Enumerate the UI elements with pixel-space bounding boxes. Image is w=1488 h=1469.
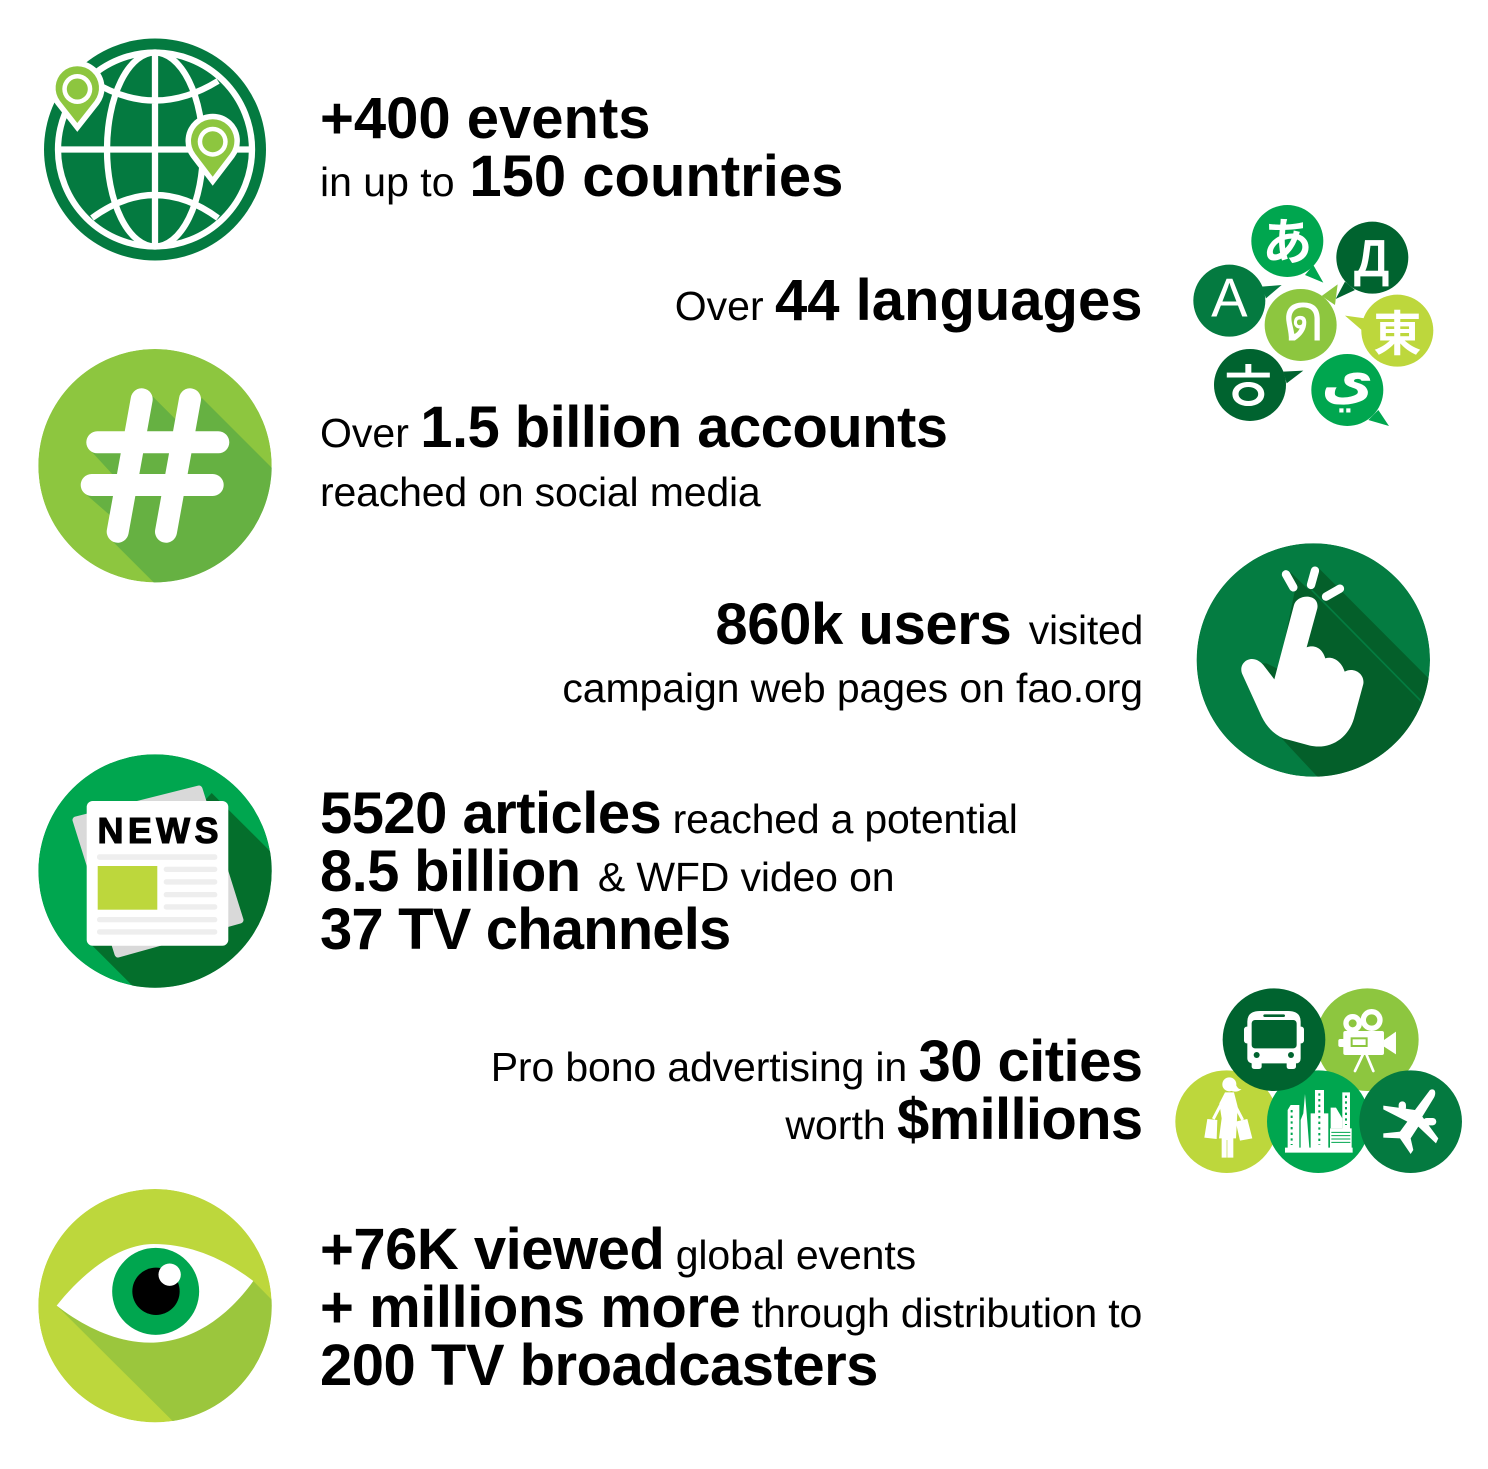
icon: bus	[1223, 988, 1325, 1091]
text: users visited: 860k users visited	[715, 592, 1143, 657]
text: accounts reached: Over 1.5 billion accounts	[320, 395, 947, 460]
icon: globe with map pins	[44, 38, 266, 260]
bubble: korean: ㅎ	[1215, 349, 1281, 429]
icon: pointing hand	[1196, 543, 1430, 777]
bubble: hiragana: あ	[1262, 214, 1312, 270]
bubble: hiragana	[1251, 205, 1323, 283]
icon: eye	[38, 1189, 287, 1422]
text: TV broadcasters: 200 TV broadcasters	[320, 1333, 878, 1398]
bubble: arabic	[1311, 346, 1389, 426]
text: TV channels: 37 TV channels	[320, 897, 730, 962]
text: worth millions: worth $millions	[784, 1087, 1142, 1152]
text: campaign web pages: campaign web pages on fao.org	[562, 665, 1143, 711]
text: millions more: + millions more through distribution to	[320, 1275, 1142, 1340]
icon: map pin right	[191, 119, 234, 177]
bubble: thai: ด	[1282, 281, 1325, 355]
text: viewed global events: +76K viewed global events	[320, 1217, 916, 1282]
icon: shopper	[1175, 1070, 1278, 1173]
bubble: arabic: ي	[1321, 346, 1373, 412]
icon: map pin left	[56, 66, 99, 123]
bubble: thai	[1263, 281, 1338, 362]
icon: newspaper: NEWS	[98, 810, 218, 851]
icon: city skyline	[1267, 1070, 1370, 1173]
text: articles: 5520 articles reached a potential	[320, 781, 1018, 846]
bubble: cyrillic	[1336, 222, 1408, 299]
bubble: cyrillic: Д	[1355, 230, 1389, 286]
bubble: latin: A	[1211, 268, 1248, 329]
icon: advertising circles	[1175, 988, 1462, 1173]
text: events and countries: +400 events	[320, 86, 651, 151]
icon: newspaper	[38, 754, 272, 988]
text: up to 150 countries: in up to 150 countries	[320, 144, 843, 209]
text: languages: Over 44 languages	[675, 268, 1142, 333]
bubble: latin	[1193, 265, 1282, 337]
text: billion and video: 8.5 billion & WFD video on	[320, 839, 894, 904]
icon: film camera	[1316, 988, 1419, 1091]
icon: hashtag	[38, 349, 272, 582]
icon: airplane	[1359, 1070, 1462, 1173]
icon: language speech bubbles	[1193, 205, 1433, 429]
text: pro bono advertising: Pro bono advertising in 30 cities	[491, 1029, 1142, 1094]
text: on social media: reached on social media	[320, 469, 761, 515]
bubble: chinese	[1345, 295, 1433, 367]
bubble: chinese: 東	[1373, 309, 1421, 362]
